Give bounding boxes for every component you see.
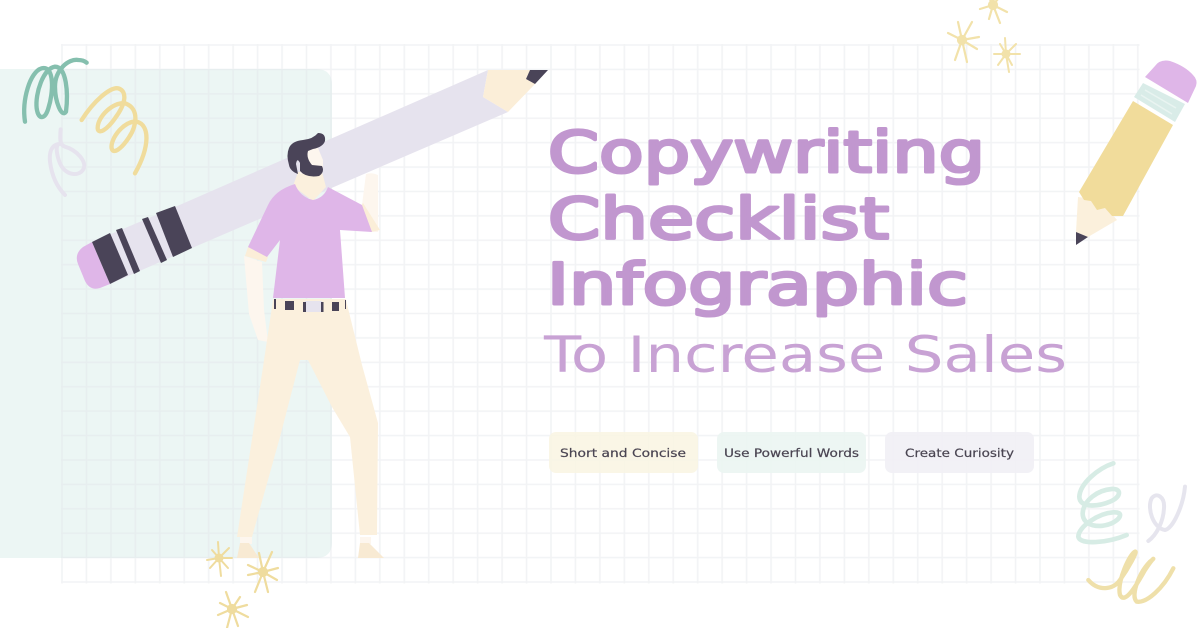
- title: [547, 120, 985, 318]
- title line 2: Checklist: [548, 186, 889, 252]
- tag: create curiosity: [885, 432, 1034, 473]
- panel: mint background: [0, 69, 332, 558]
- pencil lead: [526, 70, 548, 84]
- trousers: [237, 300, 378, 537]
- pencil ferrule: [92, 207, 192, 284]
- icon: sparkle bottom middle: [248, 552, 278, 592]
- shirt: [248, 184, 372, 298]
- body: [1079, 101, 1173, 216]
- icon: sparkle bottom: [218, 592, 248, 628]
- belt: [273, 299, 346, 312]
- ferrule: [1134, 83, 1185, 122]
- eraser: [1145, 61, 1197, 103]
- shoes: [237, 543, 384, 558]
- icon: green scribble bottom right: [1078, 463, 1127, 542]
- illustration: man: [237, 133, 384, 558]
- title line 3: Infographic: [547, 252, 968, 318]
- illustration: small pencil: [1076, 61, 1197, 245]
- wood tip: [1076, 197, 1117, 237]
- hair and beard: [288, 133, 325, 176]
- illustration: large pencil: [77, 70, 548, 289]
- icon: sparkle top right: [994, 38, 1020, 72]
- pencil eraser: [77, 242, 110, 289]
- icon: lavender scribble bottom right: [1148, 487, 1185, 541]
- neck: [293, 172, 326, 201]
- pencil body: [175, 70, 508, 248]
- tag: create curiosity: Create Curiosity: [905, 446, 1014, 460]
- ankles: [240, 537, 371, 544]
- title line 1: Copywriting: [548, 120, 985, 186]
- tag: use powerful words: [717, 432, 866, 473]
- icon: sparkle top: [980, 0, 1007, 23]
- icon: yellow scribble: [82, 88, 146, 173]
- pencil ferrule stripes: [92, 206, 192, 284]
- icon: sparkle top left: [948, 22, 979, 62]
- left cuff: [245, 247, 268, 262]
- icon: sparkle bottom left: [207, 542, 232, 576]
- face: [300, 148, 323, 174]
- subtitle: To Increase Sales: [543, 326, 1067, 384]
- pencil wood tip: [483, 70, 535, 112]
- icon: green scribble: [24, 60, 87, 122]
- icon: lavender scribble: [50, 129, 84, 195]
- right forearm: [358, 203, 380, 232]
- left arm: [244, 256, 268, 342]
- lead: [1076, 232, 1088, 245]
- raised hand: [362, 173, 378, 232]
- icon: yellow scribble bottom right: [1088, 552, 1173, 602]
- tag: short and concise: Short and Concise: [560, 446, 686, 460]
- tag: use powerful words: Use Powerful Words: [724, 446, 859, 460]
- tag: short and concise: [549, 432, 698, 473]
